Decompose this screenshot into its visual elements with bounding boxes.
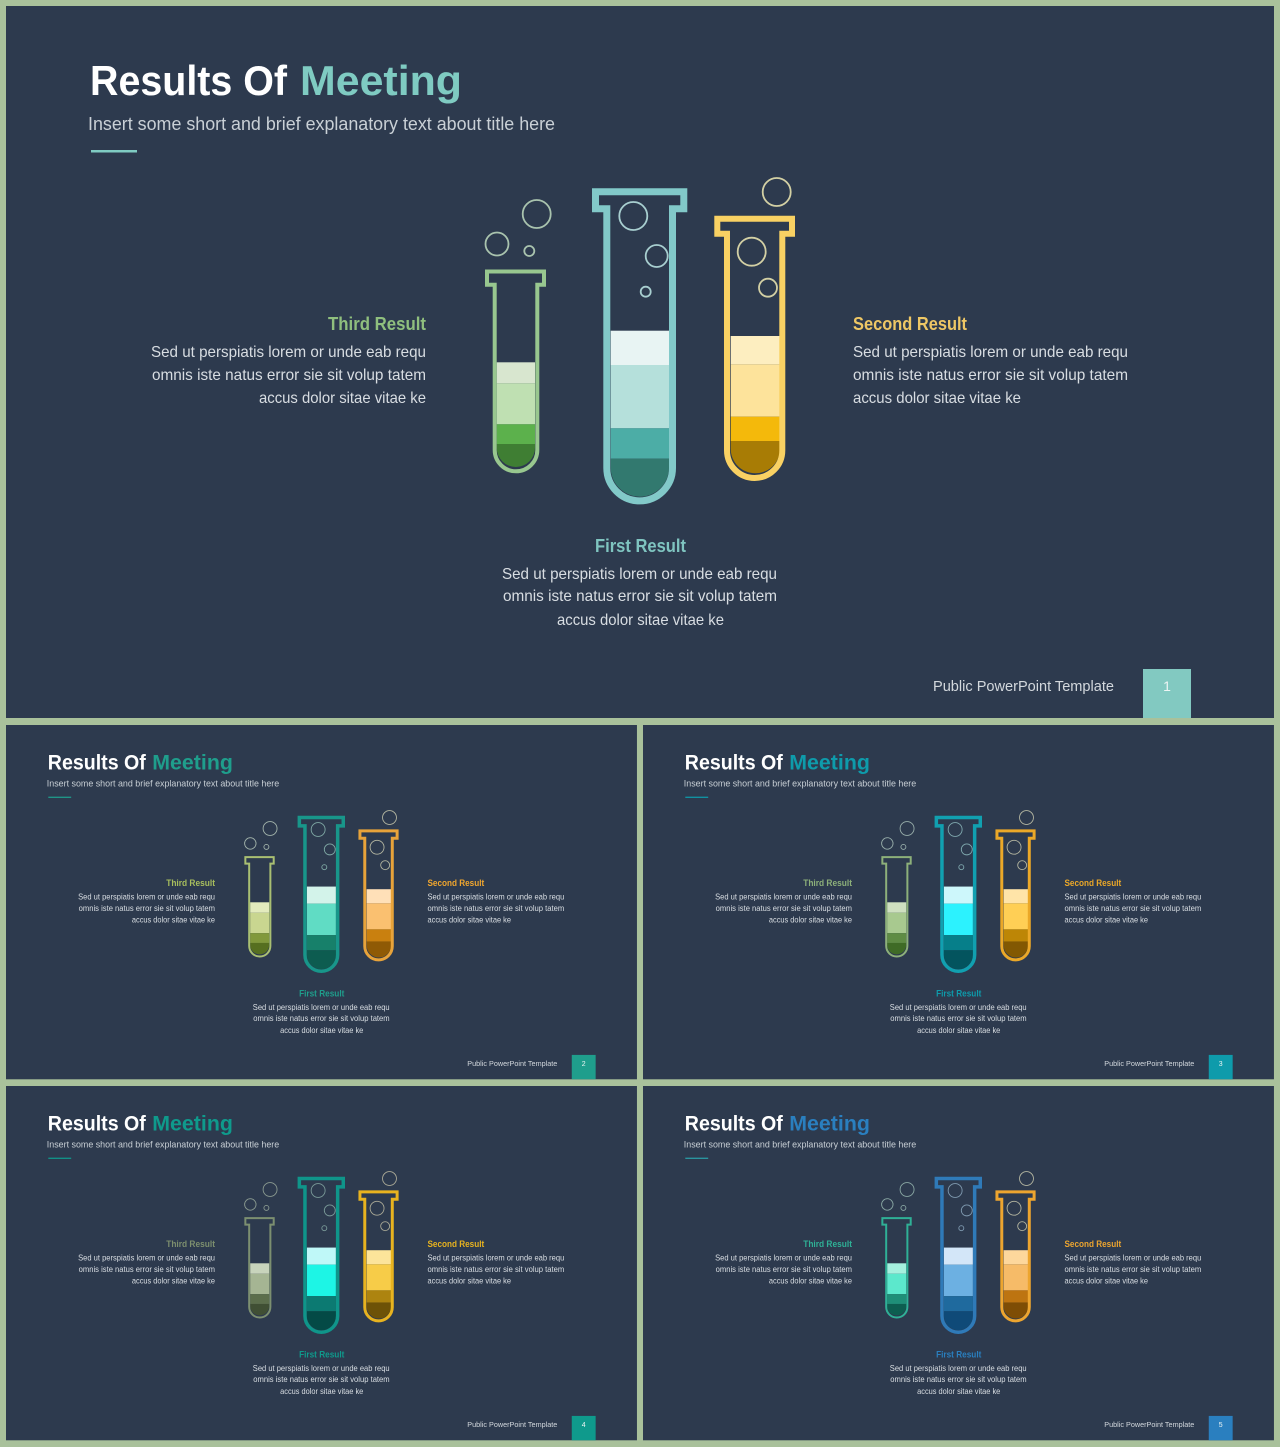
text block: first result: First Result [936, 989, 981, 999]
icon: yellow test tube [717, 178, 792, 478]
text block: first result: accus dolor sitae vitae ke [917, 1026, 1001, 1035]
icon: amber test tube [997, 811, 1034, 960]
text block: second result: Second Result [427, 878, 484, 888]
text block: second result [853, 314, 1128, 407]
page number badge [572, 1416, 596, 1440]
icon: turquoise test tube [299, 1178, 343, 1332]
text block: second result: omnis iste natus error sie sit volup tatem [1064, 904, 1202, 913]
text block: second result: Second Result [1064, 878, 1121, 888]
title underline [48, 797, 71, 798]
text block: first result: Sed ut perspiatis lorem or unde eab requ [253, 1003, 390, 1012]
text block: third result: Sed ut perspiatis lorem or unde eab requ [715, 893, 852, 902]
title [48, 751, 233, 774]
text block: first result: Sed ut perspiatis lorem or unde eab requ [253, 1364, 390, 1373]
text block: third result: omnis iste natus error sie sit volup tatem [716, 1265, 852, 1274]
page number badge [1209, 1055, 1233, 1079]
title underline [685, 797, 708, 798]
text block: second result: omnis iste natus error sie sit volup tatem [427, 904, 565, 913]
text block: first result: accus dolor sitae vitae ke [280, 1387, 364, 1396]
text block: first result: Sed ut perspiatis lorem or unde eab requ [890, 1003, 1027, 1012]
text block: third result: accus dolor sitae vitae ke [769, 916, 853, 925]
icon: gold test tube [360, 1172, 397, 1321]
title: Results Of [90, 57, 288, 104]
text block: third result: accus dolor sitae vitae ke [769, 1277, 853, 1286]
text block: third result: Sed ut perspiatis lorem or unde eab requ [715, 1254, 852, 1263]
text block: first result [253, 1350, 390, 1396]
title: Meeting [789, 751, 870, 774]
title: Results Of [48, 1112, 146, 1135]
text block: first result: omnis iste natus error sie sit volup tatem [503, 588, 777, 605]
text block: third result: accus dolor sitae vitae ke [259, 390, 426, 407]
title [48, 1112, 233, 1135]
text block: second result [1064, 1239, 1202, 1286]
text block: third result: Sed ut perspiatis lorem or unde eab requ [78, 893, 215, 902]
text block: first result: First Result [936, 1350, 981, 1360]
text block: first result: accus dolor sitae vitae ke [557, 612, 724, 629]
subtitle: Insert some short and brief explanatory text about title here [684, 1140, 916, 1150]
text block: first result [253, 989, 390, 1035]
text block: second result [1064, 878, 1202, 925]
title: Meeting [152, 1112, 233, 1135]
text block: third result: Sed ut perspiatis lorem or unde eab requ [151, 344, 426, 361]
text block: third result [715, 1239, 853, 1286]
panel: slide 3 [643, 725, 1274, 1079]
page number badge: 3 [1219, 1061, 1223, 1068]
text block: second result: Second Result [427, 1239, 484, 1249]
text block: second result: Sed ut perspiatis lorem or unde eab requ [853, 344, 1128, 361]
subtitle: Insert some short and brief explanatory text about title here [47, 779, 279, 789]
icon: orange test tube [997, 1172, 1034, 1321]
text block: second result: accus dolor sitae vitae ke [1064, 1277, 1149, 1286]
text block: third result [78, 878, 216, 925]
text block: second result [427, 878, 565, 925]
text block: third result [151, 314, 426, 407]
footer label: Public PowerPoint Template [467, 1420, 557, 1429]
page number badge [1143, 669, 1191, 718]
page number badge [572, 1055, 596, 1079]
footer label: Public PowerPoint Template [1104, 1059, 1194, 1068]
text block: first result: Sed ut perspiatis lorem or unde eab requ [890, 1364, 1027, 1373]
text block: third result: omnis iste natus error sie sit volup tatem [79, 1265, 215, 1274]
text block: third result: omnis iste natus error sie sit volup tatem [152, 367, 426, 384]
icon: green test tube [486, 200, 551, 471]
icon: green test tube [882, 822, 914, 957]
footer label: Public PowerPoint Template [467, 1059, 557, 1068]
text block: second result: Sed ut perspiatis lorem or unde eab requ [427, 1254, 564, 1263]
icon: orange test tube [360, 811, 397, 960]
icon: olive test tube [245, 1183, 277, 1318]
page number badge: 2 [582, 1061, 586, 1068]
icon: teal test tube [299, 817, 343, 971]
title: Results Of [48, 751, 146, 774]
text block: third result: Third Result [166, 878, 215, 888]
footer label: Public PowerPoint Template [1104, 1420, 1194, 1429]
text block: third result: Sed ut perspiatis lorem or unde eab requ [78, 1254, 215, 1263]
text block: second result: accus dolor sitae vitae ke [1064, 916, 1149, 925]
text block: third result: omnis iste natus error sie sit volup tatem [79, 904, 215, 913]
text block: third result: accus dolor sitae vitae ke [132, 1277, 216, 1286]
title [90, 57, 462, 104]
text block: second result: Sed ut perspiatis lorem or unde eab requ [1064, 1254, 1201, 1263]
icon: mint test tube [882, 1183, 914, 1318]
icon: lime test tube [245, 822, 277, 957]
title underline [91, 150, 137, 152]
text block: second result [427, 1239, 565, 1286]
text block: first result: First Result [299, 1350, 344, 1360]
text block: first result: First Result [595, 536, 686, 556]
text block: second result: omnis iste natus error sie sit volup tatem [427, 1265, 565, 1274]
text block: first result: First Result [299, 989, 344, 999]
title: Meeting [789, 1112, 870, 1135]
page number badge: 5 [1219, 1422, 1223, 1429]
text block: first result: accus dolor sitae vitae ke [280, 1026, 364, 1035]
title: Results Of [685, 751, 783, 774]
text block: first result: omnis iste natus error sie sit volup tatem [890, 1014, 1027, 1023]
page number badge [1209, 1416, 1233, 1440]
icon: blue test tube [936, 1178, 980, 1332]
footer label: Public PowerPoint Template [933, 678, 1114, 695]
text block: first result: omnis iste natus error sie sit volup tatem [253, 1014, 390, 1023]
text block: third result [715, 878, 853, 925]
title underline [48, 1158, 71, 1159]
text block: second result: Sed ut perspiatis lorem or unde eab requ [1064, 893, 1201, 902]
panel: slide 2 [6, 725, 637, 1079]
text block: first result: Sed ut perspiatis lorem or unde eab requ [502, 566, 777, 583]
text block: second result: accus dolor sitae vitae ke [427, 916, 512, 925]
title [685, 1112, 870, 1135]
text block: second result: accus dolor sitae vitae ke [427, 1277, 512, 1286]
text block: second result: omnis iste natus error sie sit volup tatem [853, 367, 1128, 384]
text block: third result: accus dolor sitae vitae ke [132, 916, 216, 925]
title: Meeting [152, 751, 233, 774]
page number badge: 1 [1163, 678, 1171, 694]
subtitle: Insert some short and brief explanatory text about title here [684, 779, 916, 789]
text block: second result: omnis iste natus error sie sit volup tatem [1064, 1265, 1202, 1274]
text block: first result [502, 536, 777, 629]
text block: first result [890, 989, 1027, 1035]
text block: first result: omnis iste natus error sie sit volup tatem [253, 1375, 390, 1384]
text block: second result: Second Result [853, 314, 967, 334]
panel: slide 5 [643, 1086, 1274, 1440]
text block: first result [890, 1350, 1027, 1396]
text block: first result: accus dolor sitae vitae ke [917, 1387, 1001, 1396]
text block: first result: omnis iste natus error sie sit volup tatem [890, 1375, 1027, 1384]
page number badge: 4 [582, 1422, 586, 1429]
text block: second result: accus dolor sitae vitae ke [853, 390, 1021, 407]
title underline [685, 1158, 708, 1159]
panel: slide 1 main [6, 6, 1274, 718]
text block: third result [78, 1239, 216, 1286]
text block: third result: Third Result [803, 1239, 852, 1249]
title: Results Of [685, 1112, 783, 1135]
subtitle: Insert some short and brief explanatory text about title here [47, 1140, 279, 1150]
subtitle: Insert some short and brief explanatory text about title here [88, 114, 555, 134]
icon: cyan test tube [936, 817, 980, 971]
text block: second result: Second Result [1064, 1239, 1121, 1249]
title [685, 751, 870, 774]
text block: third result: Third Result [328, 314, 426, 334]
title: Meeting [300, 57, 462, 104]
text block: third result: Third Result [166, 1239, 215, 1249]
text block: third result: Third Result [803, 878, 852, 888]
text block: third result: omnis iste natus error sie sit volup tatem [716, 904, 852, 913]
panel: slide 4 [6, 1086, 637, 1440]
icon: teal test tube [596, 192, 684, 501]
text block: second result: Sed ut perspiatis lorem or unde eab requ [427, 893, 564, 902]
